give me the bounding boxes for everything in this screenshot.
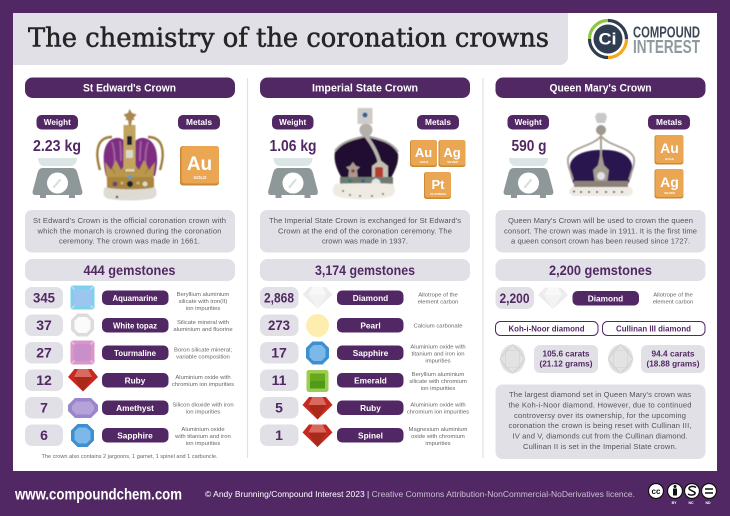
stat: Koh-i-Noor carats: 105.6 carats (542, 350, 590, 358)
footer (14, 484, 717, 505)
heading: gemstones count (260, 259, 470, 281)
weight value: 1.06 kg (270, 138, 316, 155)
row: White topaz: Silicate mineral with (177, 320, 229, 326)
row: Tourmaline (25, 340, 232, 364)
row: Sapphire: titanium and iron ion (411, 352, 465, 358)
text block: description (260, 210, 470, 252)
text block: description (25, 210, 235, 252)
label: Cullinan III diamond: Cullinan III diamond (616, 324, 691, 334)
row: Diamond: 2,200 (500, 290, 530, 306)
heading: Imperial State Crown: Imperial State Crown (312, 82, 418, 94)
text block: description: crown was made in 1937. (322, 237, 408, 246)
icon: Cullinan cut diamond (608, 344, 633, 374)
column dividers (248, 78, 483, 458)
row: Ruby: Aluminium oxide with (410, 402, 466, 408)
website url: www.compoundchem.com (14, 486, 182, 504)
label: Koh-i-Noor diamond (496, 322, 598, 336)
row: Ruby (25, 369, 234, 392)
text block: diamond story: IV and V, diamonds cut from the Cullinan diamond. (512, 432, 688, 441)
row: Sapphire: 17 (271, 344, 287, 360)
logo: Compound Interest: COMPOUND (633, 24, 700, 42)
row: Aquamarine (25, 286, 229, 312)
text block: diamond story: the Koh-i-Noor diamond. However, due to continued (508, 400, 692, 409)
stat: Koh-i-Noor carats: (21.12 grams) (540, 360, 593, 368)
icon: scales (268, 158, 318, 198)
row: Pearl: 273 (268, 317, 290, 333)
copyright and licence: © Andy Brunning/Compound Interest 2023 | Creative Commons Attribution-NonCommercial-NoDerivatives licence. (205, 489, 635, 499)
text block: description: consort. The crown was made in 1911. It is the first time (504, 226, 697, 235)
row: Spinel: 1 (275, 427, 283, 443)
row: Ruby: chromium ion impurities (172, 382, 234, 388)
text block: diamond story: controversy over its ownership, for the upcoming (514, 411, 686, 420)
row: White topaz: 37 (36, 317, 52, 333)
row: Sapphire: ion impurities (186, 441, 220, 447)
panel: Imperial State Crown (260, 78, 470, 447)
label: Koh-i-Noor diamond: Koh-i-Noor diamond (508, 324, 584, 334)
icons: creative commons: NC (688, 501, 694, 505)
element tile: gold: GOLD (194, 175, 207, 180)
element tile: platinum (424, 172, 451, 199)
row: Diamond (260, 287, 459, 308)
row: Ruby: Ruby (360, 403, 381, 413)
footnote: The crown also contains 2 jargoons, 1 garnet, 1 spinel and 1 carbuncle. (42, 454, 218, 460)
row: Tourmaline: Boron silicate mineral; (174, 348, 232, 354)
icons: creative commons (648, 484, 716, 505)
text block: description (496, 210, 706, 252)
row: Emerald: ion impurities (421, 386, 455, 392)
row: Ruby: Aluminium oxide with (175, 375, 231, 381)
row: Diamond: element carbon (418, 300, 458, 306)
icons: creative commons: ND (705, 501, 711, 505)
row: Diamond: 2,868 (264, 290, 294, 306)
element tile: gold (180, 146, 219, 186)
row: Sapphire (25, 424, 231, 447)
row: Sapphire: with titanium and iron (174, 434, 231, 440)
row: Aquamarine: 345 (33, 290, 55, 306)
icons: creative commons: cc (652, 487, 661, 496)
row: White topaz: aluminium and fluorine (173, 327, 233, 333)
row: Ruby: chromium ion impurities (407, 410, 469, 416)
icon: scales (504, 158, 553, 198)
heading: gemstones count: 444 gemstones (84, 262, 176, 278)
text block: diamond story (496, 384, 706, 459)
row: Amethyst: Silicon dioxide with iron (172, 402, 234, 408)
heading: St Edward's Crown (25, 78, 235, 98)
logo: Compound Interest (590, 20, 701, 58)
element tile: gold: Au (187, 154, 212, 175)
element tile: gold: GOLD (420, 160, 429, 164)
row: Pearl (260, 314, 463, 337)
label: metals: Metals (656, 118, 683, 127)
text block: description: which the monarch is crowned during the coronation (36, 226, 222, 235)
text block: diamond story: Cullinan II is set in the Imperial State crown. (523, 442, 677, 451)
row: Sapphire: Sapphire (117, 430, 153, 440)
label: weight: Weight (279, 118, 307, 127)
label: metals (417, 115, 459, 130)
title band (13, 13, 568, 65)
label: metals (648, 115, 690, 130)
element tile: silver: Ag (660, 174, 679, 190)
element tile: silver: SILVER (447, 160, 459, 164)
label: metals: Metals (425, 118, 452, 127)
row: Spinel: impurities (425, 441, 451, 447)
row: Emerald (260, 370, 467, 392)
row: Spinel: oxide with chromium (411, 434, 465, 440)
label: weight (272, 115, 314, 130)
row: Amethyst: ion impurities (186, 410, 220, 416)
title: The chemistry of the coronation crowns (28, 22, 549, 54)
weight value: 590 g (512, 138, 546, 155)
stat: Cullinan carats: (18.88 grams) (646, 360, 700, 368)
row: Tourmaline: Tourmaline (114, 348, 156, 358)
label: weight (36, 115, 78, 130)
row: Diamond: Diamond (588, 293, 623, 303)
element tile: platinum: PLATINUM (430, 192, 446, 196)
stat: Cullinan carats: 94.4 carats (652, 350, 695, 358)
element tile: platinum: Pt (432, 177, 445, 192)
row: Sapphire: Aluminium oxide with (410, 344, 466, 350)
text block: diamond story: The largest diamond set in Queen Mary's crown was (509, 390, 691, 399)
text block: diamond story: coronation the crown is being reset with Cullinan III, (508, 421, 692, 430)
row: Aquamarine: Beryllium aluminium (177, 292, 229, 298)
row: Aquamarine: silicate with iron(II) (179, 299, 227, 305)
heading: gemstones count (25, 259, 235, 281)
label: Cullinan III diamond (602, 322, 705, 336)
row: Diamond: Diamond (353, 293, 388, 303)
stat: Koh-i-Noor carats (534, 345, 598, 373)
element tile: silver (654, 169, 684, 198)
element tile: gold: Au (415, 145, 432, 160)
element tile: gold (410, 140, 437, 167)
text block: description: Crown at the end of the coronation ceremony. The (278, 226, 452, 235)
heading: gemstones count (496, 259, 706, 281)
row: Ruby: Ruby (125, 375, 146, 385)
row: Emerald: 11 (272, 372, 287, 388)
row: Amethyst: Amethyst (116, 403, 154, 413)
icon: Koh-i-Noor cut diamond (500, 344, 525, 374)
row: Ruby: 12 (36, 372, 52, 388)
label: metals (178, 115, 220, 130)
row: Diamond (496, 287, 694, 309)
logo: Compound Interest: Ci (598, 30, 616, 48)
row: Amethyst: 7 (40, 400, 48, 416)
crown image: St Edward's (97, 109, 163, 200)
row: Sapphire (260, 342, 466, 364)
row: Diamond: Allotrope of the (653, 292, 694, 298)
element tile: silver: SILVER (664, 191, 676, 195)
row: Emerald: silicate with chromium (409, 379, 467, 385)
row: Ruby: 5 (275, 400, 283, 416)
element tile: silver (438, 140, 466, 167)
label: metals: Metals (186, 118, 213, 127)
icon: scales (33, 158, 82, 198)
label: weight: Weight (44, 118, 71, 127)
row: Sapphire: Aluminium oxide (181, 427, 225, 433)
row: Ruby (260, 397, 469, 420)
row: Amethyst (25, 397, 234, 418)
heading: St Edward's Crown: St Edward's Crown (83, 82, 176, 94)
row: Sapphire: impurities (425, 358, 451, 364)
row: Spinel: Spinel (358, 430, 383, 440)
row: Diamond: element carbon (653, 300, 693, 306)
label: weight (508, 115, 549, 130)
row: Pearl: Pearl (360, 320, 381, 330)
row: Sapphire: 6 (40, 427, 48, 443)
element tile: gold (654, 135, 684, 164)
heading: Queen Mary's Crown: Queen Mary's Crown (550, 82, 652, 94)
element tile: gold: Au (660, 140, 679, 156)
row: Emerald: Beryllium aluminium (412, 372, 464, 378)
row: Pearl: Calcium carbonate (413, 324, 463, 330)
row: White topaz (25, 314, 233, 336)
heading: gemstones count: 3,174 gemstones (315, 262, 415, 278)
text block: description: Queen Mary's Crown will be used to crown the queen (508, 216, 693, 225)
row: Aquamarine: Aquamarine (112, 293, 158, 303)
text block: description: ceremony. The crown was made in 1661. (59, 237, 200, 246)
logo: Compound Interest: INTEREST (633, 36, 701, 57)
text block: description: St Edward's Crown is the official coronation crown with (33, 216, 226, 225)
row: Spinel: Magnesium aluminium (409, 427, 468, 433)
panel: Queen Mary's Crown (496, 78, 706, 459)
row: Emerald: Emerald (354, 375, 387, 385)
element tile: gold: GOLD (665, 157, 675, 161)
row: Diamond: Allotrope of the (418, 292, 459, 298)
row: White topaz: White topaz (113, 320, 157, 330)
text block: description: a queen consort crown has been reused since 1727. (511, 237, 690, 246)
panel: St Edward's Crown (25, 78, 235, 460)
icons: creative commons: BY (672, 501, 677, 505)
heading: Imperial State Crown (260, 78, 470, 98)
label: weight: Weight (515, 118, 542, 127)
text block: description: The Imperial State Crown is exchanged for St Edward's (269, 216, 461, 225)
element tile: silver: Ag (443, 145, 461, 160)
crown image: Imperial State (333, 108, 398, 199)
row: Sapphire: Sapphire (353, 348, 389, 358)
row: Aquamarine: ion impurities (186, 306, 220, 312)
crown image: Queen Mary's (568, 113, 634, 196)
heading: Queen Mary's Crown (496, 78, 706, 98)
heading: gemstones count: 2,200 gemstones (549, 262, 652, 278)
row: Tourmaline: variable composition (176, 354, 230, 360)
stat: Cullinan carats (641, 345, 705, 373)
row: Spinel (260, 424, 468, 447)
weight value: 2.23 kg (33, 138, 81, 155)
row: Tourmaline: 27 (36, 344, 52, 360)
